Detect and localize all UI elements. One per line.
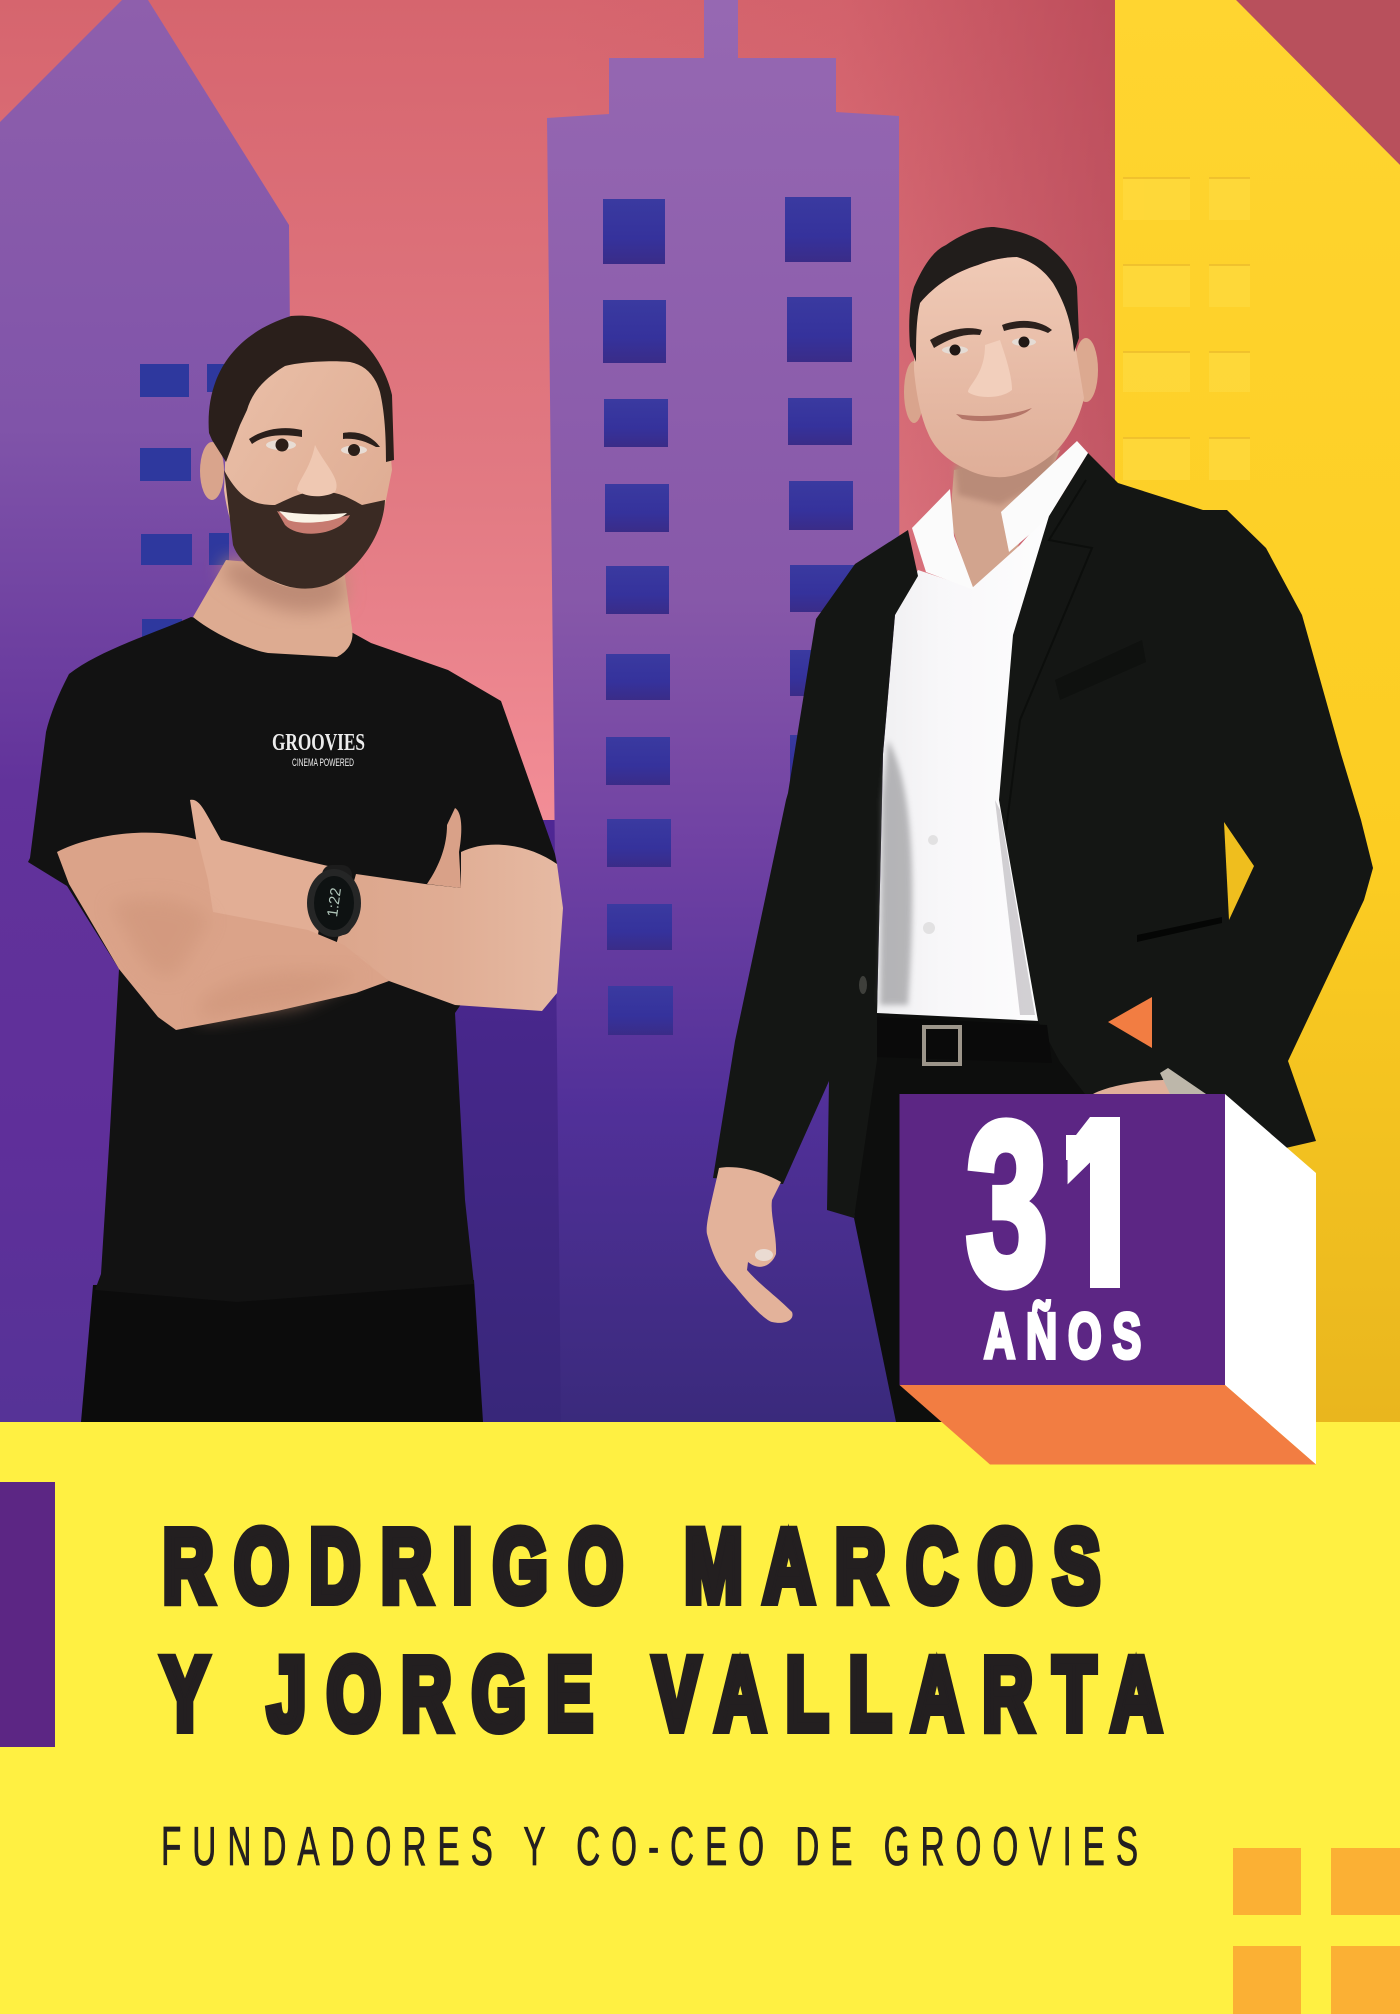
shirt logo: GROOVIES: [272, 730, 365, 756]
forearm on the left side of the picture: [57, 833, 389, 1030]
shirt logo: CINEMA POWERED: [292, 757, 354, 769]
shirt buttons: [923, 835, 938, 934]
suit jacket: right front and sleeve: [999, 453, 1373, 1150]
photo background: pink wall: [0, 0, 1400, 1422]
shirt collar: [912, 441, 1088, 590]
face: [224, 324, 392, 588]
nose: [968, 340, 1012, 397]
shirt shading: [880, 740, 912, 1005]
trousers: [81, 1280, 483, 1422]
belt: [877, 1017, 1052, 1064]
purple side bar: [0, 1482, 55, 1747]
lapel line: [1006, 480, 1092, 830]
white shirt: [877, 465, 1090, 1021]
ear left: [904, 361, 924, 423]
nose: [297, 445, 337, 496]
eyes and brows: [930, 321, 1052, 356]
wrist watch: 1:22: [324, 887, 345, 918]
neck: [950, 450, 1060, 590]
title: [162, 1509, 1182, 1751]
central purple skyscraper: [547, 0, 900, 1422]
suit jacket: left front: [713, 530, 918, 1218]
badge purple front: [900, 1094, 1225, 1385]
arm on the right side of the picture: [336, 845, 563, 1011]
badge white side: [1225, 1094, 1316, 1464]
decorative window squares: [1233, 1848, 1400, 2014]
neck: [193, 560, 352, 657]
jacket button: [859, 976, 867, 994]
trousers: [854, 1000, 1100, 1422]
badge label: AÑOS: [984, 1300, 1152, 1372]
person: Jorge Vallarta: [707, 227, 1373, 1422]
yellow lower panel: [0, 1422, 1400, 2014]
mouth: [277, 511, 350, 534]
shirt logo: [272, 730, 365, 769]
badge number: 31: [966, 1075, 1143, 1332]
gap between arm and body: [1224, 822, 1254, 920]
breast pocket: [1055, 640, 1146, 700]
badge orange bottom: [900, 1385, 1316, 1464]
person: Rodrigo Marcos: [28, 316, 563, 1422]
ear: [200, 442, 224, 500]
hand in pocket and wrist: [1093, 1080, 1175, 1094]
wrist watch: [307, 865, 361, 937]
hand: [707, 1167, 793, 1323]
hair: [909, 227, 1079, 362]
ear right: [1074, 338, 1098, 402]
age badge: [900, 1075, 1316, 1464]
left purple building: [0, 0, 565, 1422]
face: [914, 257, 1084, 477]
eyes and brows: [249, 428, 380, 456]
accent triangle: [1108, 997, 1152, 1048]
hair: [209, 316, 394, 462]
yellow building: [1115, 0, 1400, 1422]
fingers on the right arm: [427, 808, 461, 888]
mouth: [956, 408, 1032, 421]
hip pocket: [1137, 917, 1222, 942]
t-shirt: [28, 617, 557, 1302]
beard: [224, 470, 385, 589]
hand tucked under the arm: [190, 800, 328, 935]
